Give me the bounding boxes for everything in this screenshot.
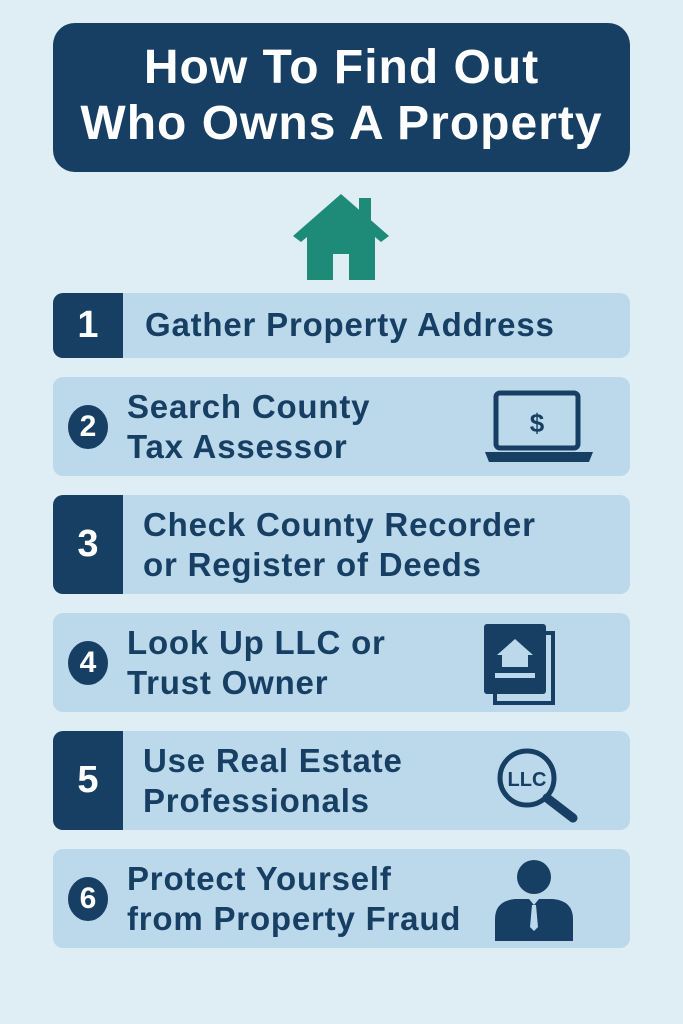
step 5 — [53, 731, 630, 830]
step 2 — [53, 377, 630, 476]
icon: laptop — [485, 390, 593, 462]
title: How To Find Out — [144, 41, 539, 94]
step 4 — [53, 613, 630, 712]
icon: laptop: $ — [530, 408, 545, 438]
icon: magnifier LLC — [498, 748, 578, 822]
text 6 — [127, 860, 461, 937]
text 5 — [143, 742, 403, 819]
number 3 — [53, 495, 123, 594]
text 4 — [127, 624, 386, 701]
number 6 — [68, 877, 108, 921]
text 4: Trust Owner — [127, 664, 328, 701]
text 2 — [127, 388, 370, 465]
icon: person — [495, 860, 573, 941]
number 6: 6 — [80, 882, 96, 915]
title — [53, 23, 630, 172]
number 2: 2 — [80, 410, 96, 443]
number 5 — [53, 731, 123, 830]
text 5: Professionals — [143, 782, 370, 819]
text 2: Tax Assessor — [127, 428, 348, 465]
text 6: Protect Yourself — [127, 860, 392, 897]
number 2 — [68, 405, 108, 449]
text 3 — [143, 506, 536, 583]
icon: house — [293, 194, 389, 280]
text 5: Use Real Estate — [143, 742, 403, 779]
text 2: Search County — [127, 388, 370, 425]
number 5: 5 — [77, 759, 99, 801]
step 6 — [53, 849, 630, 948]
icon: deed documents — [484, 624, 555, 705]
icon: magnifier LLC: LLC — [508, 769, 546, 791]
title: Who Owns A Property — [80, 97, 603, 150]
number 1 — [53, 293, 123, 358]
number 4: 4 — [80, 646, 96, 679]
number 4 — [68, 641, 108, 685]
step 1 — [53, 293, 630, 358]
text 1: Gather Property Address — [145, 306, 555, 343]
text 6: from Property Fraud — [127, 900, 461, 937]
number 3: 3 — [77, 523, 99, 565]
text 3: or Register of Deeds — [143, 546, 482, 583]
number 1: 1 — [77, 304, 99, 346]
text 4: Look Up LLC or — [127, 624, 386, 661]
step 3 — [53, 495, 630, 594]
text 3: Check County Recorder — [143, 506, 536, 543]
